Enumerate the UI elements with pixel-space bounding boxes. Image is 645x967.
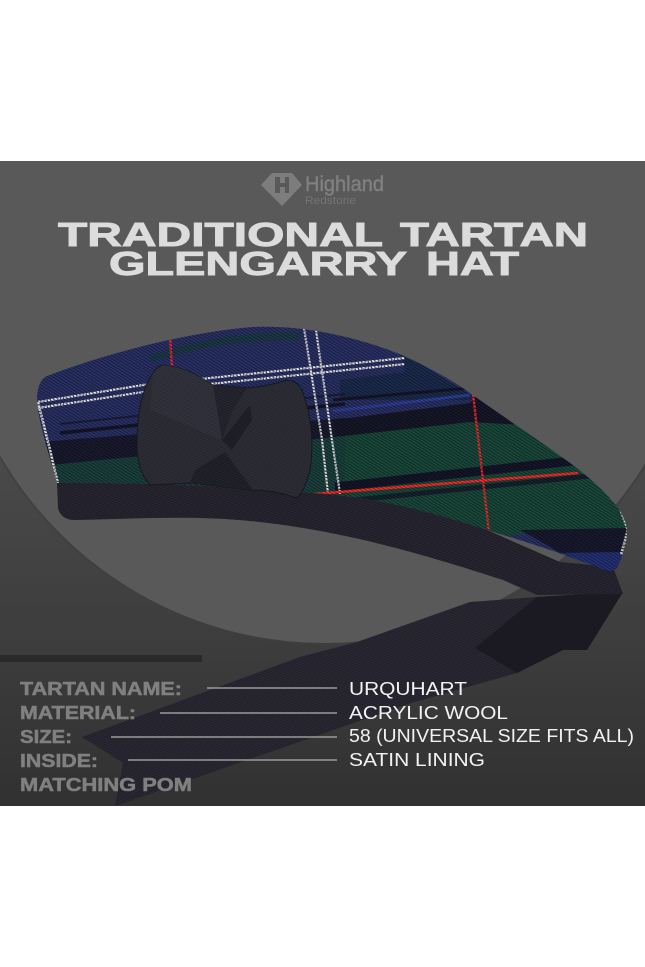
spec values: SATIN LINING xyxy=(349,749,485,770)
title: GLENGARRY xyxy=(109,245,407,282)
spec labels xyxy=(20,678,192,795)
green field xyxy=(335,422,640,540)
spec values: 58 (UNIVERSAL SIZE FITS ALL) xyxy=(349,725,634,746)
leader lines xyxy=(111,688,337,760)
logo: Highland Redstone: Redstone xyxy=(305,195,356,207)
backdrop circle xyxy=(0,161,645,643)
hat ribbon tails xyxy=(82,592,623,806)
dark base right xyxy=(520,528,627,566)
tartan crown xyxy=(30,320,640,580)
logo: Highland Redstone xyxy=(261,173,384,207)
dark band right xyxy=(345,397,536,439)
green top stripe xyxy=(150,332,300,362)
spec labels: SIZE: xyxy=(20,726,72,747)
white vertical stripes xyxy=(304,328,328,494)
dark band left xyxy=(40,418,345,466)
green field left xyxy=(40,436,345,495)
spec values xyxy=(349,678,634,770)
dark teal right of white stripes xyxy=(340,352,480,400)
title: TRADITIONAL xyxy=(58,216,383,253)
logo: Highland Redstone: Highland xyxy=(305,173,384,196)
matching pom bow xyxy=(137,365,312,498)
footer accent bar xyxy=(0,655,202,662)
background panel xyxy=(0,161,645,806)
title xyxy=(58,216,588,282)
white horizontal stripes xyxy=(38,358,405,402)
title: HAT xyxy=(426,245,519,282)
spec labels: INSIDE: xyxy=(20,750,98,771)
spec values: URQUHART xyxy=(349,678,467,699)
spec values: ACRYLIC WOOL xyxy=(349,702,508,723)
spec labels: MATERIAL: xyxy=(20,702,136,723)
navy dark lines xyxy=(60,404,345,433)
title: TARTAN xyxy=(400,216,588,253)
spec labels: TARTAN NAME: xyxy=(20,678,182,699)
red stripes xyxy=(170,336,172,368)
spec labels: MATCHING POM xyxy=(20,774,192,795)
hat band xyxy=(57,483,623,595)
